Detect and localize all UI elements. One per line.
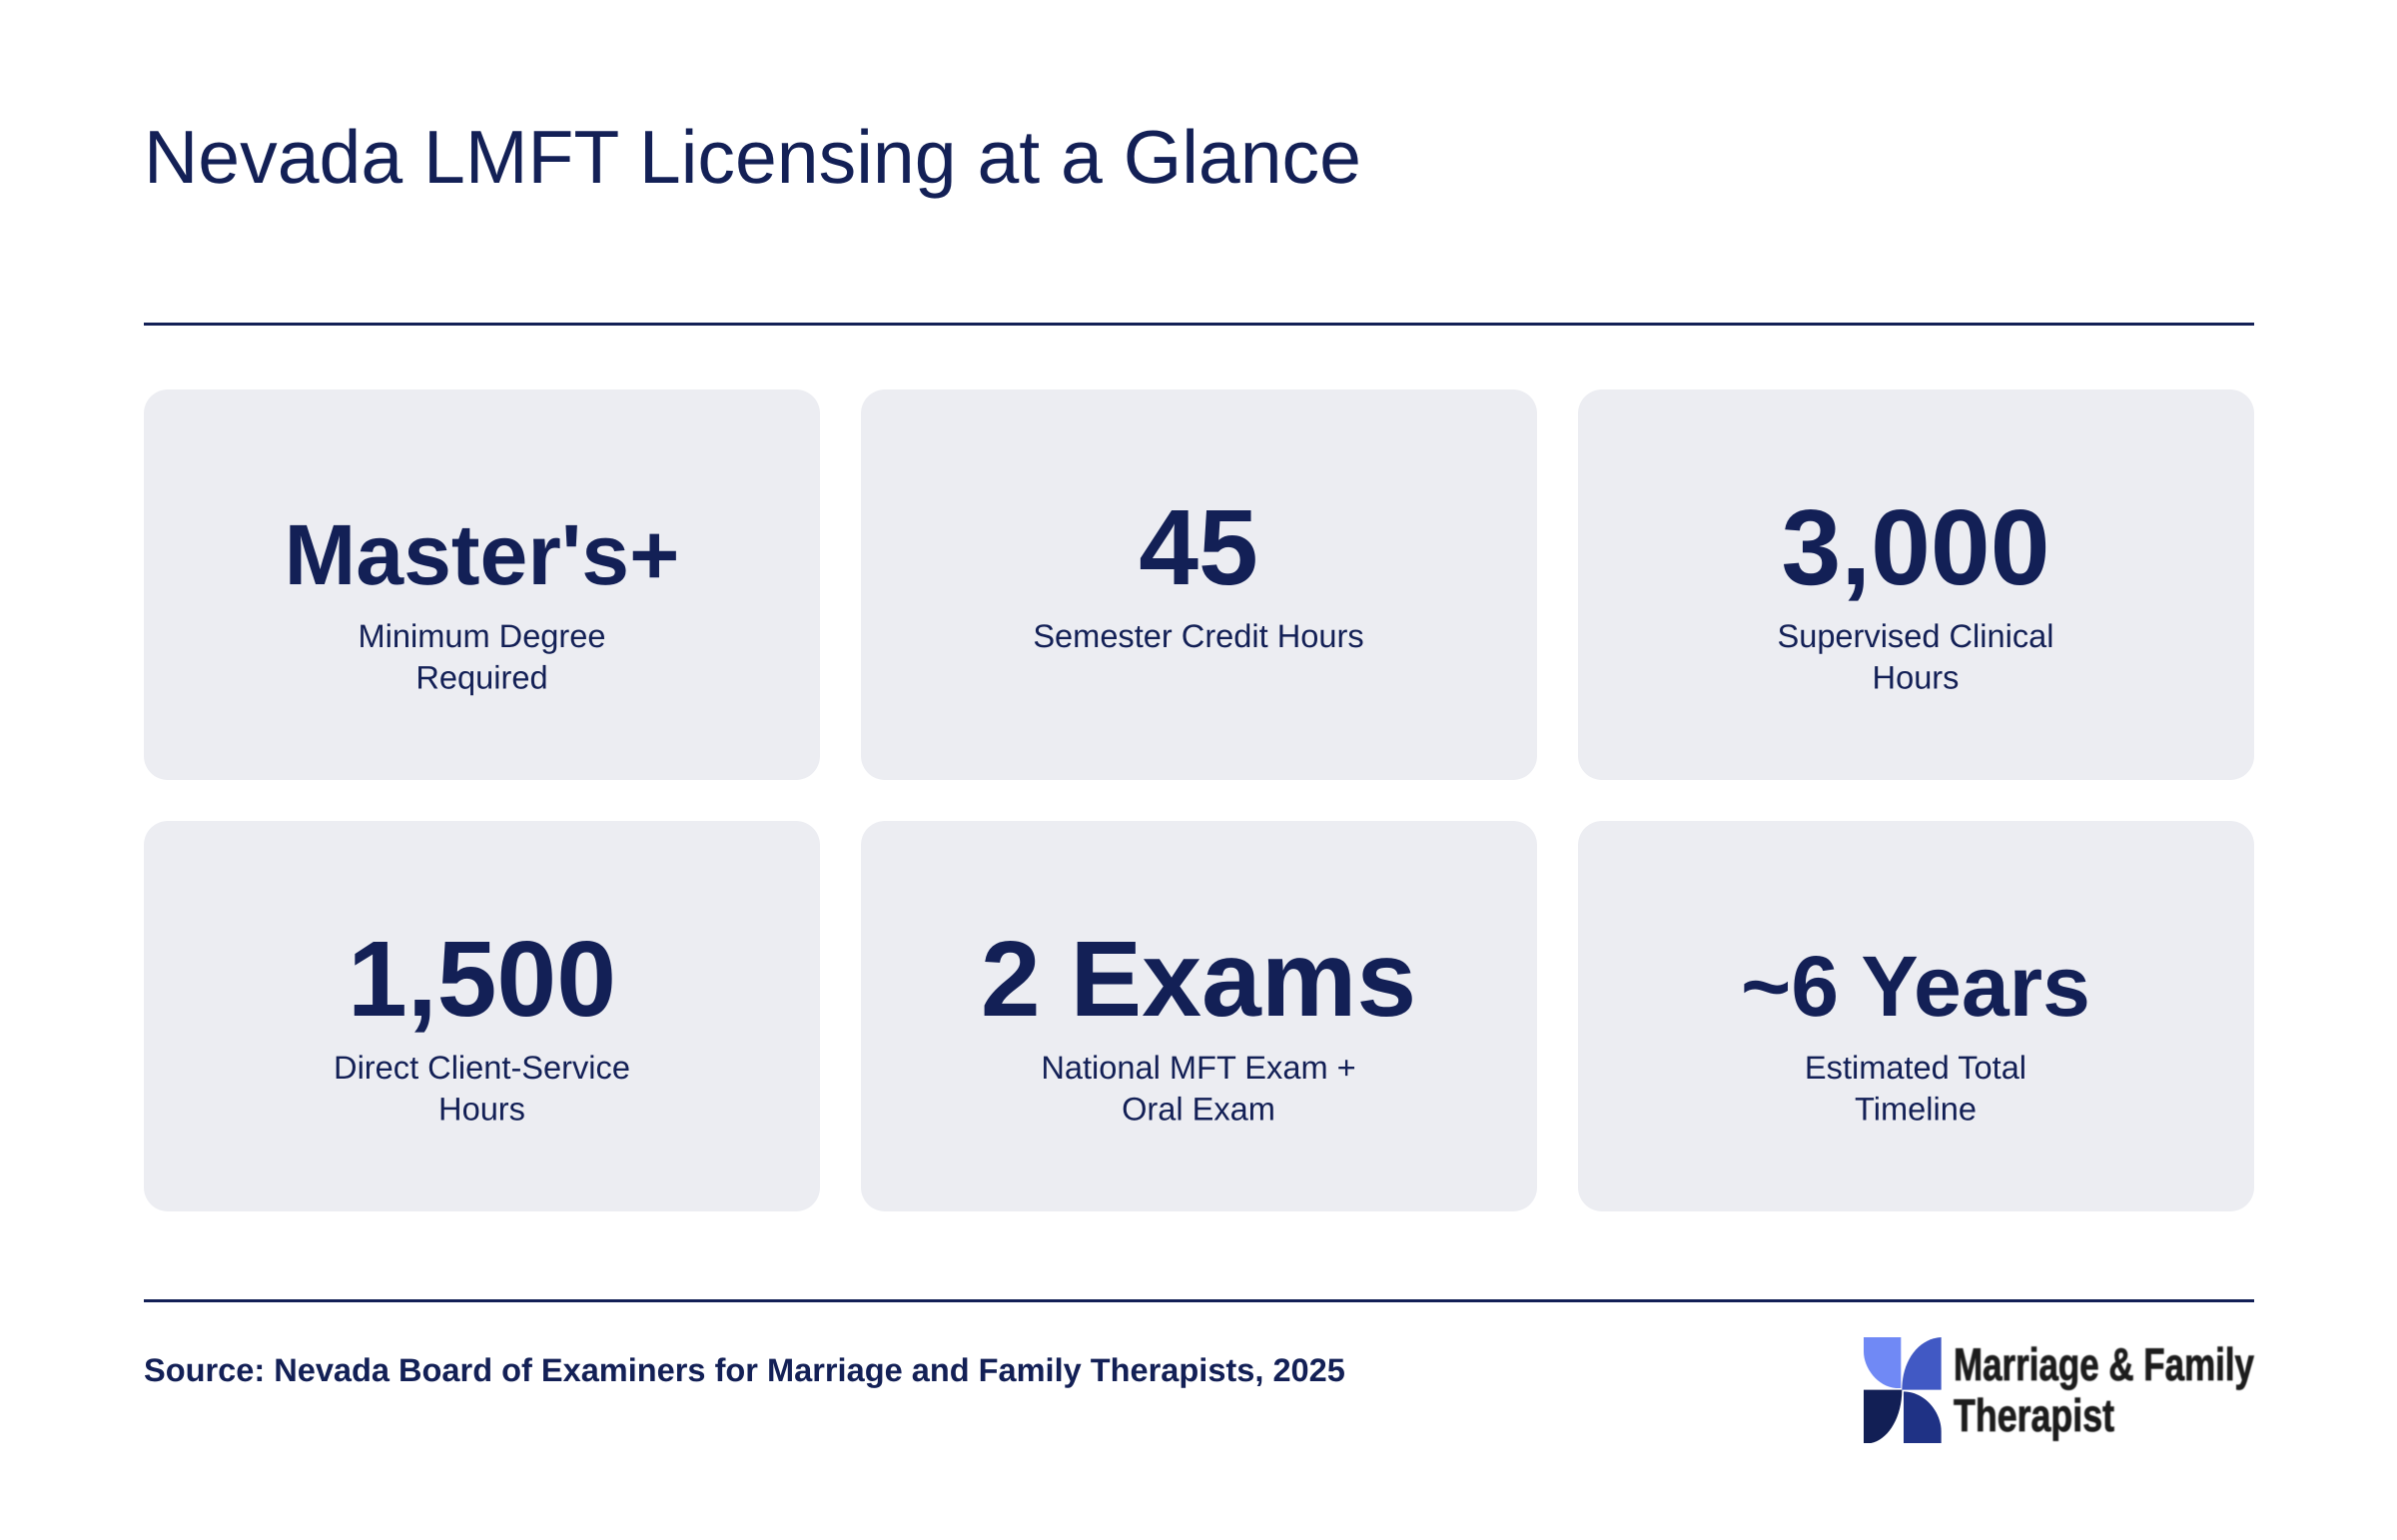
- panel: clinical hours: [1578, 389, 2254, 780]
- label: direct client-service hours: Hours: [438, 1091, 525, 1127]
- label: estimated total timeline: Estimated Total: [1805, 1049, 2026, 1086]
- logo wordmark: Marriage & Family: [1954, 1338, 2254, 1390]
- panel: timeline: [1578, 821, 2254, 1211]
- value: Master's+: Master's+: [285, 507, 679, 603]
- label: semester credit hours: Semester Credit Hours: [1033, 617, 1364, 654]
- label: minimum degree required: Required: [415, 659, 548, 695]
- label: national MFT exam plus oral exam: National MFT Exam +: [1041, 1049, 1356, 1086]
- value: 2 Exams: 2 Exams: [981, 919, 1416, 1039]
- label: direct client-service hours: Direct Client-Service: [334, 1049, 630, 1086]
- title: Nevada LMFT Licensing at a Glance: [144, 115, 1361, 199]
- label: supervised clinical hours: Supervised Clinical: [1777, 617, 2054, 654]
- value: 1,500: 1,500: [348, 919, 616, 1039]
- source note: Source: Nevada Board of Examiners for Marriage and Family Therapists, 2025: [144, 1352, 1345, 1388]
- logo wordmark: Therapist: [1954, 1389, 2114, 1441]
- panel: credit hours: [861, 389, 1537, 780]
- logo: [1864, 1337, 2254, 1443]
- value: ~6 Years: ~6 Years: [1741, 939, 2090, 1035]
- icon: pinwheel mark: [1864, 1337, 1942, 1443]
- label: estimated total timeline: Timeline: [1855, 1091, 1977, 1127]
- value: 3,000: 3,000: [1781, 487, 2050, 607]
- value: 45: 45: [1139, 487, 1258, 607]
- label: minimum degree required: Minimum Degree: [358, 617, 606, 654]
- panel: client-service hours: [144, 821, 820, 1211]
- label: supervised clinical hours: Hours: [1873, 659, 1959, 695]
- logo wordmark: [1954, 1338, 2254, 1441]
- panel: minimum degree: [144, 389, 820, 780]
- label: national MFT exam plus oral exam: Oral Exam: [1122, 1091, 1275, 1127]
- panel: exams: [861, 821, 1537, 1211]
